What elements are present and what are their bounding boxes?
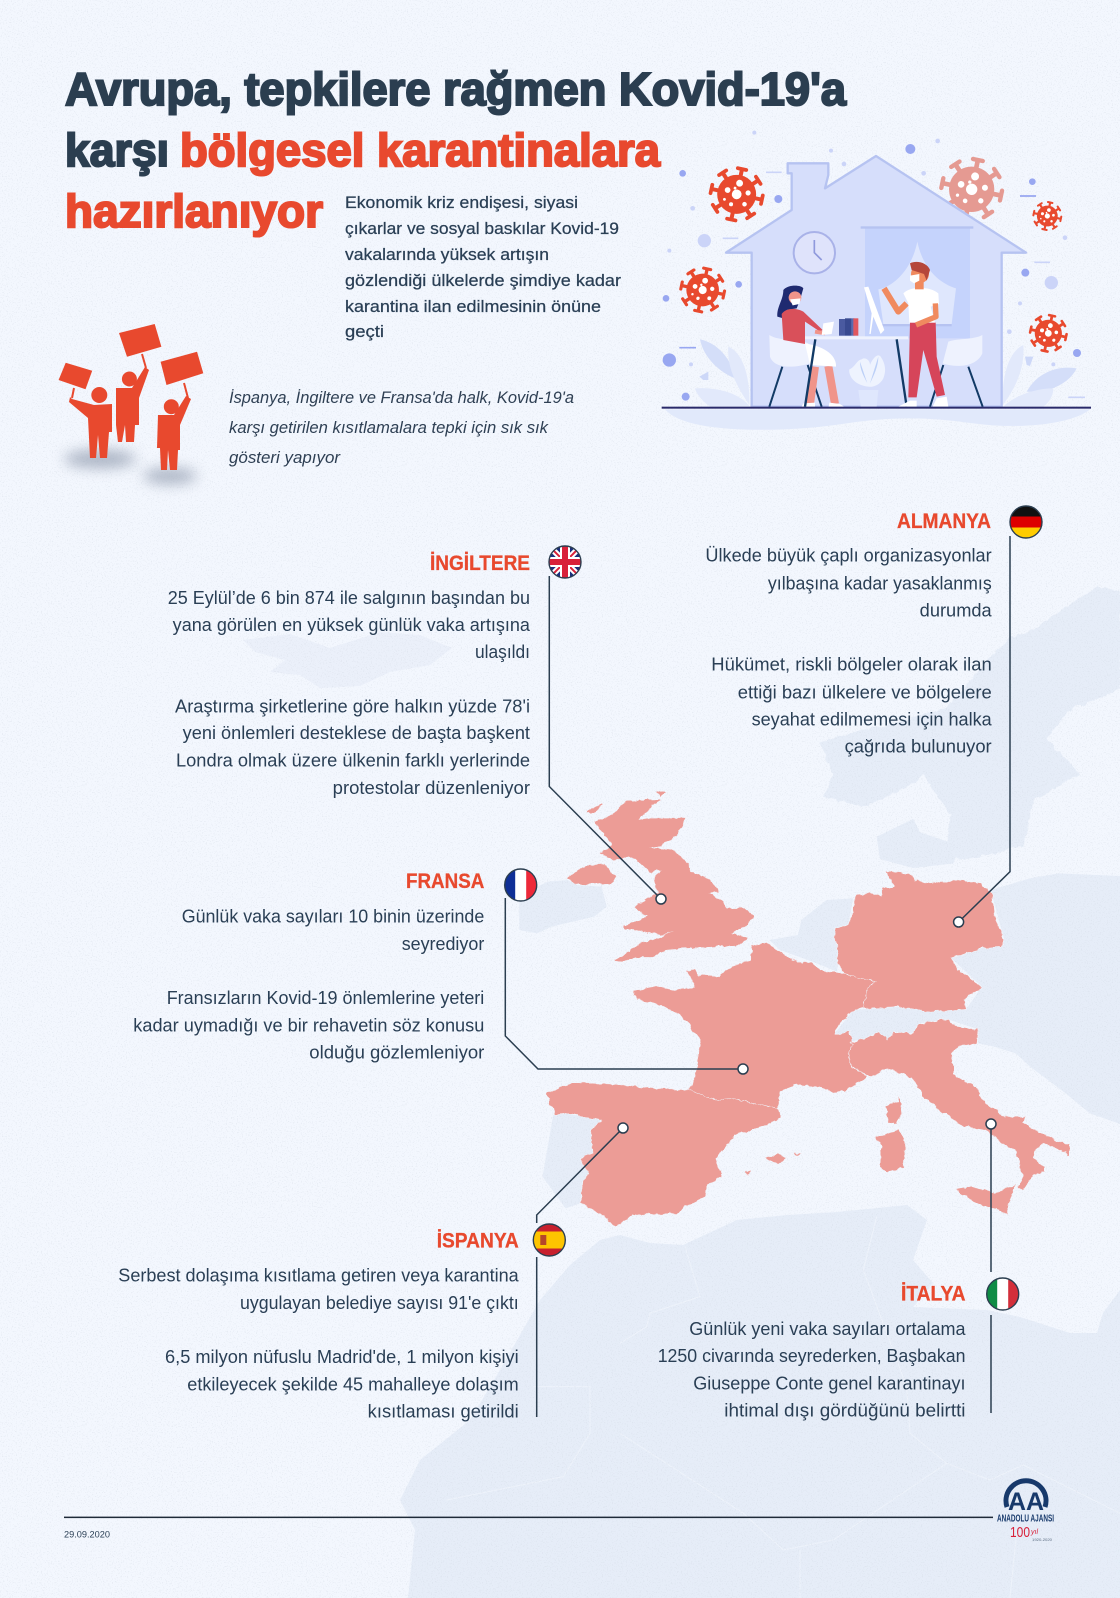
body text: Giuseppe Conte genel karantinayı: [693, 1374, 966, 1394]
Eastern Europe and Switzerland: [834, 873, 1120, 1130]
logo: Anadolu Ajansı: 100: [1010, 1524, 1030, 1541]
body text: protestolar düzenleniyor: [333, 778, 530, 798]
flag: UK: [548, 545, 582, 579]
heading: İSPANYA: [437, 1230, 519, 1253]
italic note: İspanya, İngiltere ve Fransa'da halk, Kovid-19'a: [229, 388, 574, 407]
clock: [794, 232, 835, 273]
callout: İtalya: [658, 1119, 1020, 1421]
footer rule: [64, 1517, 993, 1518]
decorative dots: [663, 131, 1085, 401]
woman: [777, 286, 844, 407]
left chair: [769, 335, 822, 407]
highlighted countries map: [546, 792, 1069, 1227]
title: hazırlanıyor: [65, 185, 323, 237]
intro text: gözlendiği ülkelerde şimdiye kadar: [345, 271, 621, 290]
callout: İngiltere: [168, 545, 666, 904]
body text: olduğu gözlemleniyor: [309, 1043, 484, 1063]
Portugal: [542, 1113, 601, 1208]
icon: protesters: [59, 324, 203, 484]
desk: [805, 336, 908, 407]
background borders: [447, 1217, 1120, 1598]
heading: FRANSA: [406, 870, 484, 893]
marker: [656, 894, 666, 904]
monitor: [864, 287, 884, 334]
right plants: [1003, 345, 1077, 407]
pink virus: [936, 154, 1007, 225]
title: [65, 63, 846, 237]
Italy: [848, 1019, 1069, 1190]
right chair: [930, 335, 983, 407]
Spain: [546, 1083, 782, 1227]
logo: Anadolu Ajansı: 1920-2020: [1032, 1537, 1053, 1542]
callout: İspanya: [118, 1123, 628, 1422]
heading: İNGİLTERE: [430, 552, 530, 575]
italic note: [229, 388, 574, 467]
body text: uygulayan belediye sayısı 91'e çıktı: [240, 1293, 519, 1313]
Scandinavia: [820, 587, 1120, 859]
italic note: karşı getirilen kısıtlamalara tepki için sık sık: [229, 418, 549, 437]
ground blob: [665, 409, 1090, 430]
heading: İTALYA: [901, 1283, 966, 1306]
body text: Araştırma şirketlerine göre halkın yüzde 78'i: [175, 696, 530, 716]
body text: 1250 civarında seyrederken, Başbakan: [658, 1346, 966, 1366]
red viruses: [677, 164, 1070, 355]
body text: çağrıda bulunuyor: [845, 737, 992, 757]
Corsica, Sardinia and Sicily: [876, 1097, 1015, 1214]
body text: [133, 907, 484, 1063]
Benelux: [769, 898, 853, 972]
body text: [118, 1266, 520, 1422]
body text: etkileyecek şekilde 45 mahalleye dolaşım: [187, 1375, 519, 1395]
Northern Ireland: [567, 864, 616, 884]
title: karşı: [65, 124, 169, 176]
flag: France: [504, 868, 538, 902]
body text: Hükümet, riskli bölgeler olarak ilan: [711, 655, 992, 675]
intro text: karantina ilan edilmesinin önüne: [345, 297, 601, 316]
title: bölgesel karantinalara: [180, 124, 660, 176]
Ireland: [519, 880, 607, 933]
body text: kadar uymadığı ve bir rehavetin söz konusu: [133, 1016, 484, 1036]
flag: Spain: [532, 1223, 566, 1257]
illustration: house with two masked people and viruses: [662, 131, 1091, 430]
italic note: gösteri yapıyor: [229, 448, 341, 467]
France: [632, 943, 876, 1108]
body text: durumda: [920, 601, 993, 621]
logo: Anadolu Ajansı: [997, 1481, 1054, 1542]
title: Avrupa, tepkilere rağmen Kovid-19'a: [65, 63, 846, 115]
flag: Italy: [986, 1277, 1020, 1311]
body text: Günlük yeni vaka sayıları ortalama: [689, 1319, 966, 1339]
desk items: laptop and books: [822, 318, 858, 336]
body text: seyrediyor: [402, 934, 484, 954]
body text: seyahat edilmemesi için halka: [752, 710, 993, 730]
body text: [705, 546, 993, 757]
left plants: [695, 339, 750, 407]
intro text: Ekonomik kriz endişesi, siyasi: [345, 193, 578, 212]
leader line: [990, 1129, 992, 1413]
logo: Anadolu Ajansı: yıl: [1030, 1529, 1038, 1536]
intro text: vakalarında yüksek artışın: [345, 245, 549, 264]
body text: [658, 1319, 966, 1421]
body text: 6,5 milyon nüfuslu Madrid'de, 1 milyon kişiyi: [165, 1347, 519, 1367]
body text: Günlük vaka sayıları 10 binin üzerinde: [182, 907, 484, 927]
Germany: [834, 871, 1004, 1012]
body text: yeni önlemleri desteklese de başta başkent: [183, 723, 530, 743]
body text: yılbaşına kadar yasaklanmış: [768, 573, 992, 593]
body text: 25 Eylül’de 6 bin 874 ile salgının başından bu: [168, 588, 530, 608]
Balearic islands: [744, 1153, 801, 1174]
man: [884, 262, 948, 407]
callout: Almanya: [705, 505, 1043, 927]
body text: [168, 588, 531, 798]
Scottish islands: [587, 792, 666, 815]
body text: Ülkede büyük çaplı organizasyonlar: [705, 546, 992, 566]
window and curtains: [861, 226, 973, 338]
North Africa: [400, 1205, 1120, 1598]
body text: ettiği bazı ülkelere ve bölgelere: [738, 682, 992, 702]
body text: ihtimal dışı gördüğünü belirtti: [724, 1401, 966, 1421]
body text: ulaşıldı: [475, 642, 530, 662]
heading: ALMANYA: [897, 510, 991, 533]
body text: Serbest dolaşıma kısıtlama getiren veya karantina: [118, 1266, 520, 1286]
leader line: [505, 898, 743, 1069]
intro text: çıkarlar ve sosyal baskılar Kovid-19: [345, 219, 619, 238]
flag: Germany: [1009, 505, 1043, 540]
body text: Fransızların Kovid-19 önlemlerine yeteri: [167, 988, 484, 1008]
body text: Londra olmak üzere ülkenin farklı yerlerinde: [176, 750, 530, 770]
plant in pot: [849, 355, 885, 407]
body text: kısıtlaması getirildi: [368, 1402, 519, 1422]
floor line: [662, 407, 1091, 409]
logo: Anadolu Ajansı: ANADOLU AJANSI: [997, 1514, 1054, 1524]
leader line: [959, 536, 1010, 922]
leader line: [537, 1128, 623, 1417]
marker: [986, 1119, 996, 1129]
leader line: [549, 576, 661, 899]
Denmark: [877, 819, 960, 868]
callout: Fransa: [133, 868, 748, 1074]
intro text: [345, 193, 621, 341]
date: 29.09.2020: [64, 1530, 110, 1541]
Iceland: [243, 632, 452, 688]
Great Britain: [594, 799, 753, 962]
body text: yana görülen en yüksek günlük vaka artışına: [173, 615, 531, 635]
intro text: geçti: [345, 322, 384, 341]
house: [726, 156, 1026, 407]
marker: [738, 1064, 748, 1074]
marker: [618, 1123, 628, 1133]
marker: [954, 917, 964, 927]
logo: Anadolu Ajansı: AA: [1008, 1488, 1044, 1516]
background map of surrounding land: [243, 587, 1120, 1598]
